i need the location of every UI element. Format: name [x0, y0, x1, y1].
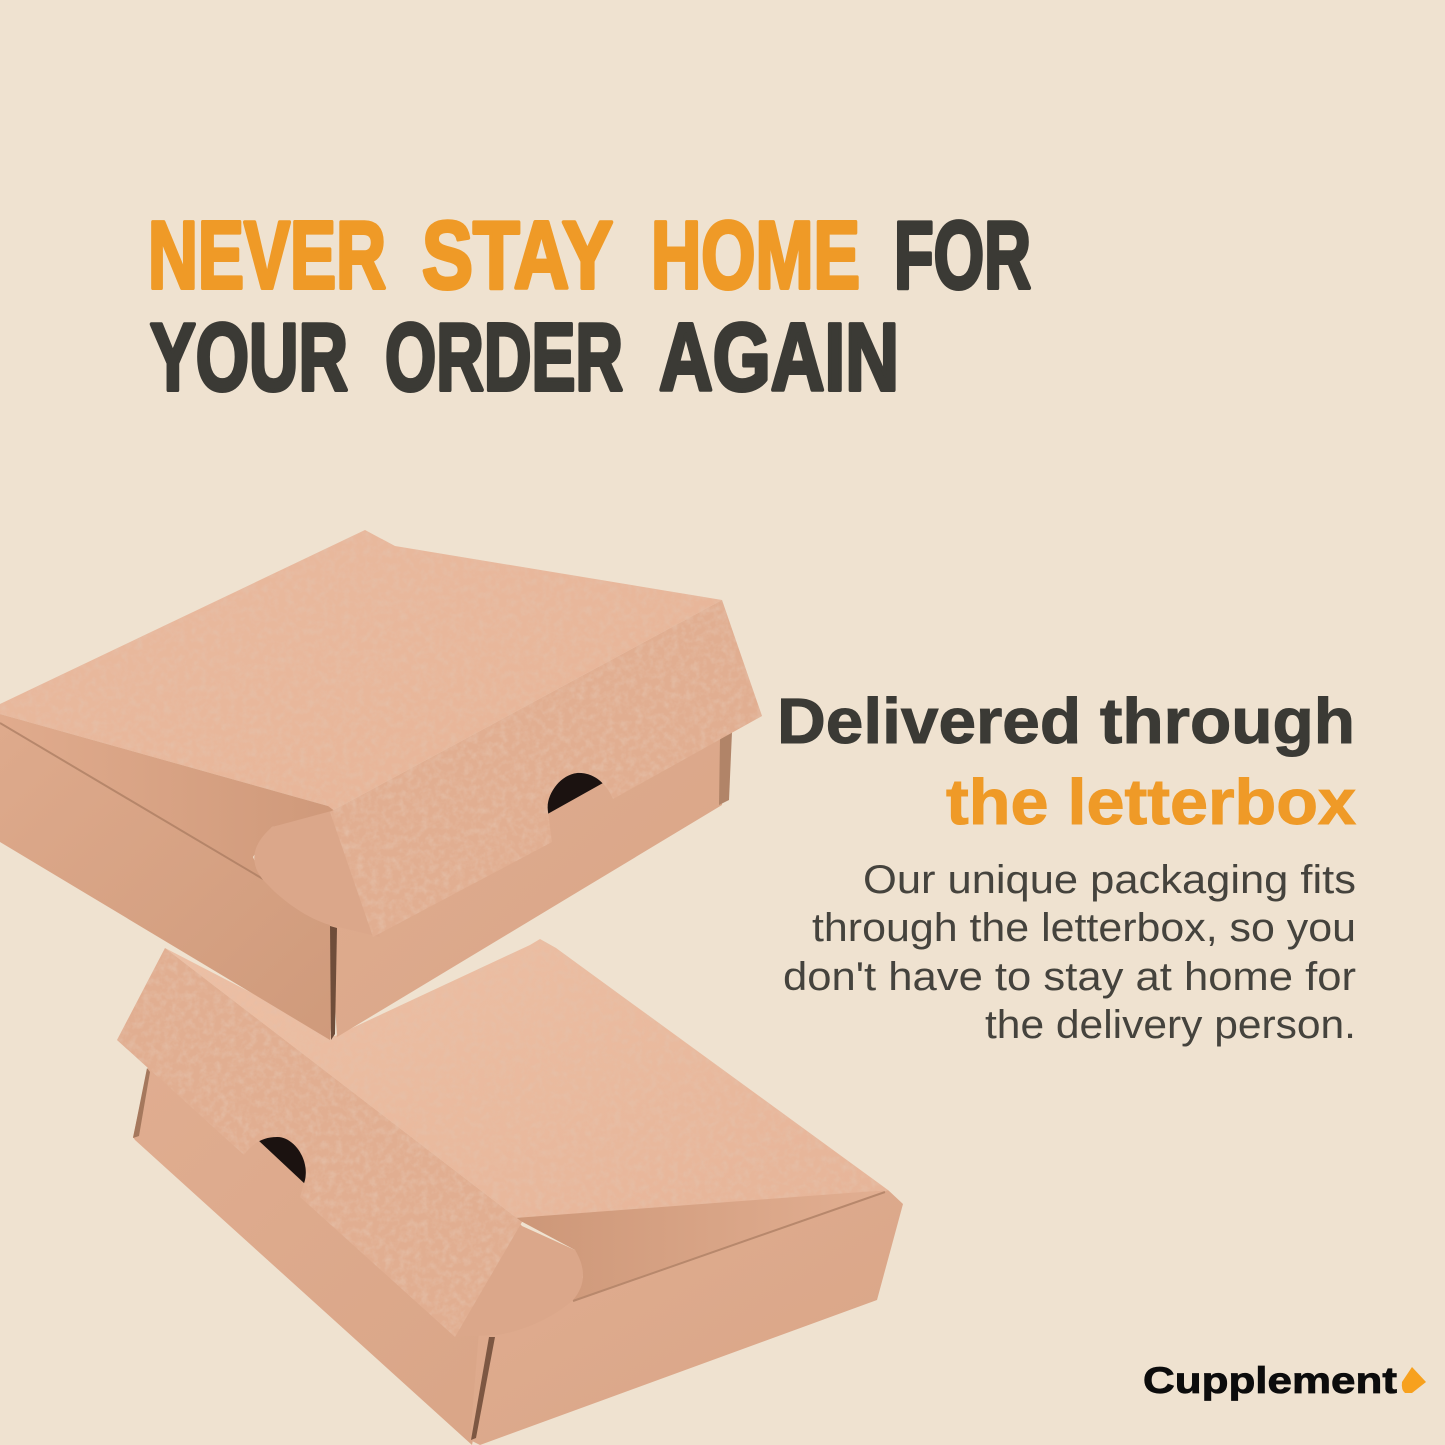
- top face: [165, 939, 888, 1222]
- corner slit: [471, 1337, 495, 1440]
- left side wall: [0, 716, 340, 1040]
- illustration: lower cardboard box: [117, 939, 903, 1445]
- flap crease line: [573, 1192, 885, 1301]
- slot hole: [258, 1135, 310, 1184]
- subheading: [777, 685, 1356, 838]
- title: FOR: [894, 202, 1031, 309]
- back slit: [719, 732, 732, 805]
- body text: the delivery person.: [985, 1003, 1356, 1047]
- title: NEVER: [148, 202, 386, 309]
- logo: Cupplement: Cupplement: [1143, 1360, 1397, 1401]
- left side wall: [133, 1068, 520, 1445]
- back slit: [133, 1068, 150, 1138]
- title: AGAIN: [659, 304, 899, 411]
- top face: [0, 530, 722, 812]
- slot hole: [544, 769, 603, 816]
- title: YOUR: [150, 304, 348, 411]
- right side wall: [330, 680, 728, 1037]
- illustration: upper cardboard box: [0, 530, 762, 1040]
- title: ORDER: [385, 304, 623, 411]
- body text: don't have to stay at home for: [783, 955, 1356, 999]
- icon: orange diamond: [1402, 1367, 1426, 1393]
- body text: through the letterbox, so you: [812, 906, 1356, 950]
- lid front panel: [117, 948, 522, 1337]
- flap crease line: [0, 723, 263, 879]
- body text: Our unique packaging fits: [863, 858, 1356, 902]
- round tuck flap: [450, 1218, 583, 1337]
- inner triangular flap: [0, 714, 340, 880]
- lid front panel: [330, 600, 762, 937]
- inner triangular flap: [515, 1190, 888, 1300]
- title: [148, 202, 1031, 411]
- body text: [783, 858, 1356, 1047]
- subheading: Delivered through: [777, 685, 1355, 757]
- title: STAY: [422, 202, 613, 309]
- title: HOME: [651, 202, 860, 309]
- corner slit: [330, 926, 337, 1040]
- round tuck flap: [254, 810, 380, 937]
- right side wall: [470, 1190, 903, 1445]
- subheading: the letterbox: [946, 766, 1356, 838]
